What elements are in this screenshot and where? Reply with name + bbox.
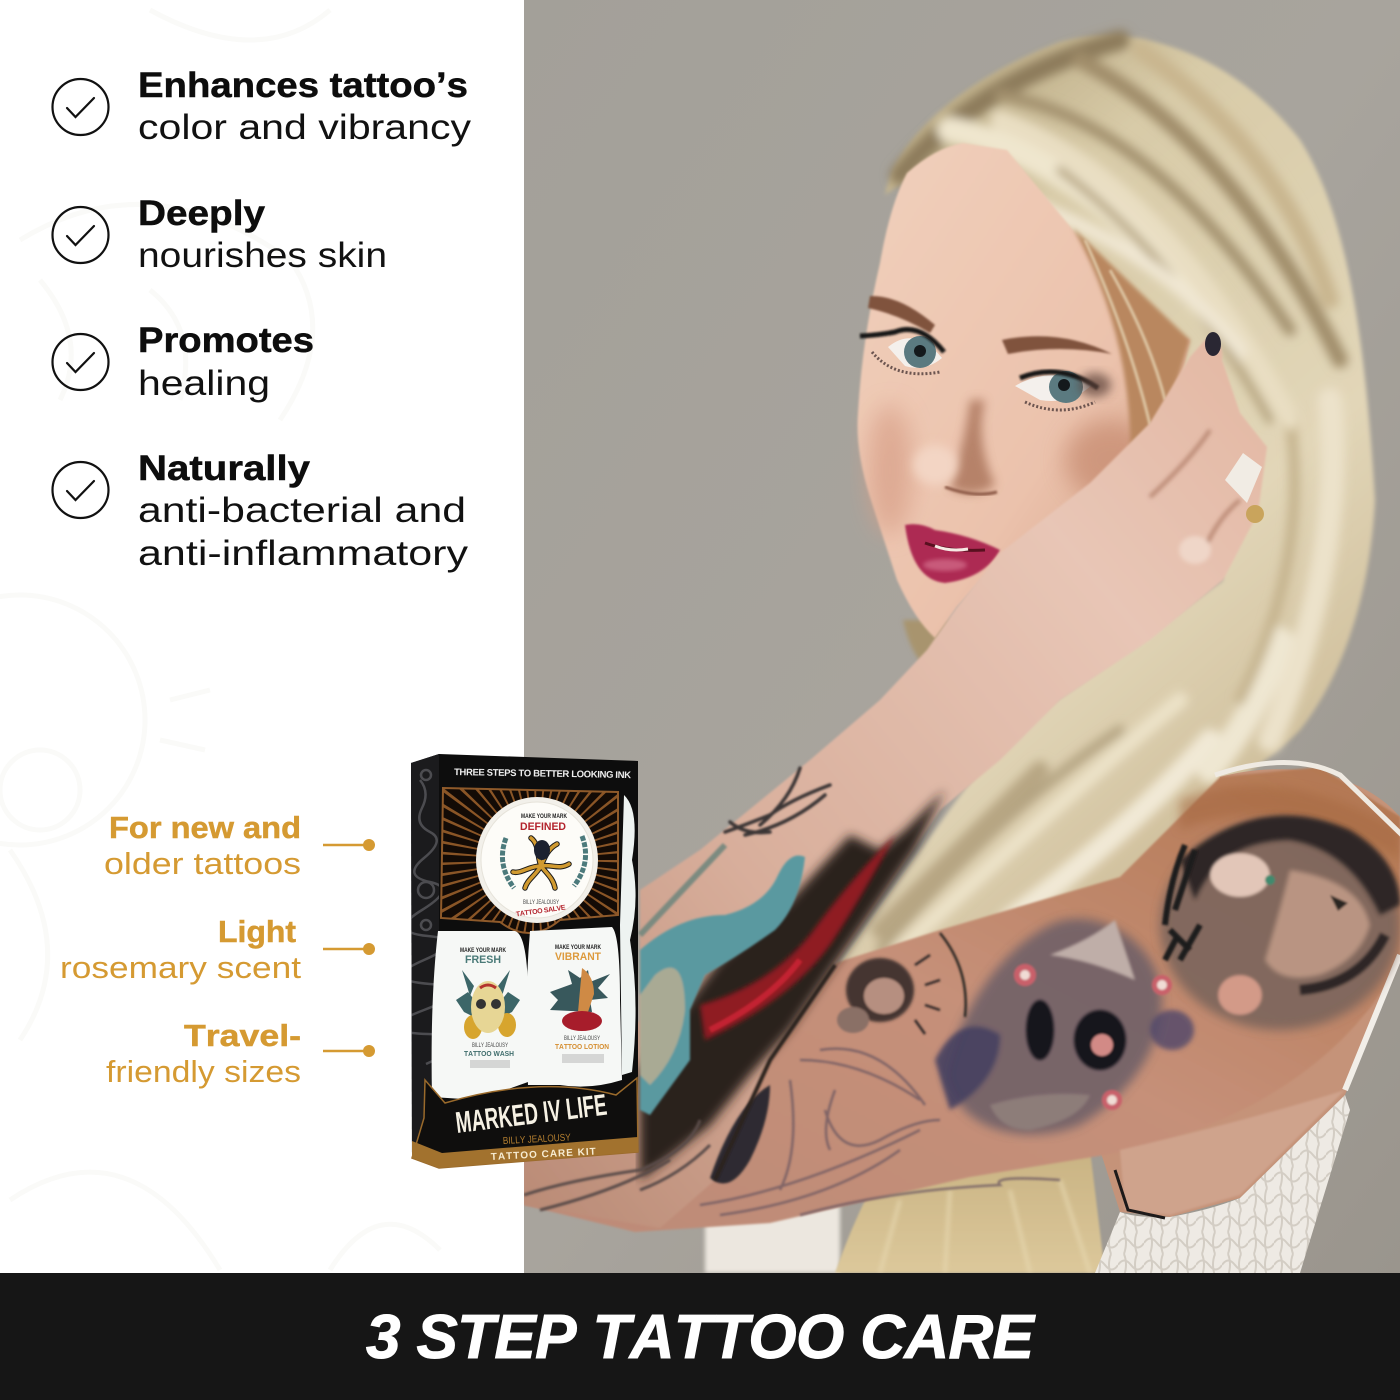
nail [1205, 332, 1221, 356]
feature: promotes healing [52, 321, 314, 403]
hair strands middle [880, 400, 1332, 950]
box body [411, 754, 638, 1168]
forearm fold [715, 965, 835, 1180]
forearm and hand [524, 339, 1267, 1228]
hair lower [835, 1150, 1105, 1273]
face [858, 143, 1190, 638]
product box [396, 754, 638, 1168]
bottle: tattoo wash: TATTOO WASH [464, 1049, 514, 1058]
left eye [860, 330, 944, 374]
finger details [1150, 430, 1240, 564]
product box: TATTOO CARE KIT [491, 1147, 596, 1163]
white dress behind, left [702, 1206, 842, 1273]
bottle: tattoo wash [432, 931, 528, 1100]
banner [412, 1078, 638, 1168]
tattoo: sugar skull [935, 919, 1194, 1134]
icon: check circle [52, 207, 108, 263]
tin: tattoo salve: DEFINED [520, 821, 566, 833]
bottle: tattoo wash: MAKE YOUR MARK [460, 948, 507, 954]
bottle: tattoo wash: FRESH [465, 954, 501, 966]
dress strap and edge [1215, 762, 1400, 835]
tin: tattoo salve: MAKE YOUR MARK [521, 813, 567, 820]
feature: anti-bacterial: Naturally [138, 449, 311, 488]
icon: check circle [52, 334, 108, 390]
callout: rosemary scent: rosemary scent [60, 950, 301, 985]
lower arm [524, 767, 1400, 1232]
neck hair [902, 618, 948, 660]
chest / shoulder [1100, 769, 1400, 1217]
temple hair [1073, 228, 1190, 470]
feature: anti-bacterial: anti-inflammatory [138, 534, 469, 573]
callouts [60, 810, 375, 1089]
tattoo: script lettering [1165, 845, 1200, 960]
product box: BILLY JEALOUSY [503, 1132, 571, 1147]
ring [1225, 453, 1262, 503]
callout: new and older tattoos [104, 810, 375, 881]
box side panel [411, 754, 439, 1152]
feature: color and vibrancy [52, 66, 472, 147]
bottle: tattoo lotion: BILLY JEALOUSY [564, 1036, 600, 1042]
eyebrows [868, 296, 935, 333]
tin: tattoo salve: TATTOO SALVE [516, 905, 566, 918]
feature: nourishes skin: nourishes skin [138, 236, 387, 275]
cheek and nose shading [868, 400, 1155, 535]
feature: anti-bacterial: anti-bacterial and [138, 491, 466, 530]
feature: anti-bacterial [52, 449, 469, 573]
bottle: tattoo lotion: TATTOO LOTION [555, 1042, 609, 1051]
footer band [0, 1273, 1400, 1400]
footer title: 3 STEP TATTOO CARE [366, 1303, 1036, 1372]
banner text: MARKED IV LIFE [454, 1089, 609, 1140]
feature: color and vibrancy: Enhances tattoo’s [138, 66, 468, 105]
tattoo: teal bird [640, 845, 805, 1115]
bottle: tattoo lotion [526, 927, 622, 1087]
callout: rosemary scent: Light [218, 914, 296, 949]
bottle: tattoo wash: BILLY JEALOUSY [472, 1043, 508, 1049]
feature: nourishes skin [52, 194, 387, 275]
tin: tattoo salve [476, 797, 598, 923]
hair strands crown [900, 40, 1340, 420]
feature: promotes healing: Promotes [138, 321, 314, 360]
left white panel [0, 0, 524, 1273]
right eye [1015, 371, 1111, 410]
hair mass [830, 36, 1375, 975]
tattoo: flowing line work [700, 1049, 1060, 1215]
icon: check circle [52, 462, 108, 518]
feature: nourishes skin: Deeply [138, 194, 266, 233]
box header text: THREE STEPS TO BETTER LOOKING INK [454, 767, 631, 781]
tattoo: feather [725, 768, 830, 835]
callout: new and older tattoos: older tattoos [104, 846, 301, 881]
callout: travel-friendly: Travel- [184, 1018, 301, 1053]
dress lace [1095, 1095, 1350, 1273]
tattoo: elbow sketch [524, 1120, 710, 1210]
callout: rosemary scent [60, 914, 375, 985]
tattoo: dark smear and flames [640, 790, 945, 1180]
lips [905, 524, 1000, 583]
feature: color and vibrancy: color and vibrancy [138, 108, 472, 147]
bottle: tattoo lotion: MAKE YOUR MARK [555, 945, 602, 951]
feature list [52, 66, 472, 573]
callout: travel-friendly: friendly sizes [106, 1054, 301, 1089]
sunburst panel [441, 788, 618, 933]
tattoo: portrait sleeve [1160, 815, 1400, 1030]
feature: promotes healing: healing [138, 364, 270, 403]
bottle: tattoo lotion: VIBRANT [555, 951, 601, 963]
tattoo: small portrait [837, 933, 966, 1034]
window shine [620, 795, 636, 1075]
callout: new and older tattoos: For new and [109, 810, 301, 845]
tattoo: forearm mesh [710, 1085, 770, 1184]
tin: tattoo salve: BILLY JEALOUSY [523, 899, 559, 906]
callout: travel-friendly [106, 1018, 375, 1089]
icon: check circle [52, 79, 108, 135]
photo: tattooed woman [524, 0, 1400, 1273]
